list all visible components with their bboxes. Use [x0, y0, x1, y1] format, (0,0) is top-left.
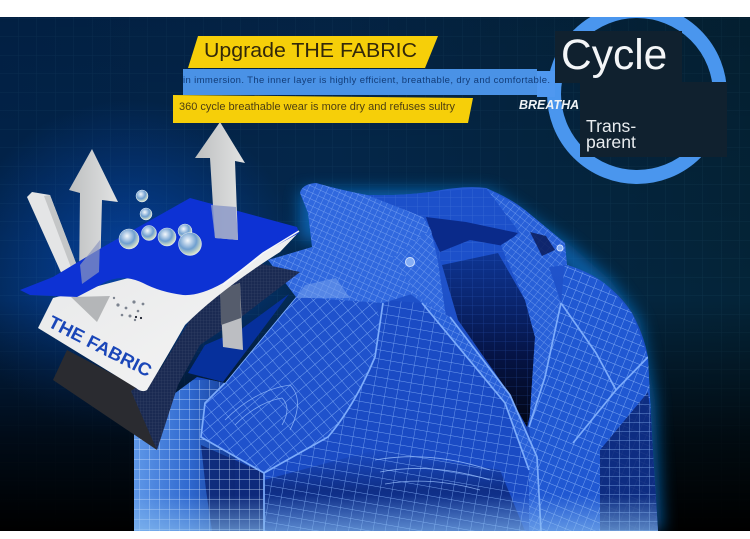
grey upward arrow left: [69, 149, 118, 285]
front placket: [422, 303, 541, 531]
navy translucent layer: [188, 294, 289, 382]
diagonal arrow lower tip: [71, 296, 110, 322]
heading banner: Upgrade THE FABRIC: [188, 36, 438, 68]
dark box: Cycle: Cycle: [561, 32, 667, 79]
dark box: Transparent: Trans-: [586, 116, 636, 136]
fabric label text: THE FABRIC: [45, 312, 155, 381]
white sheet edge: [223, 231, 299, 285]
blue circle ring: [554, 11, 720, 177]
shirt seams: [201, 297, 648, 531]
white membrane layer: [38, 233, 298, 391]
left chest mesh panel: [202, 348, 368, 472]
water vapour specks: [113, 297, 144, 321]
dark interior of shirt opening: [442, 253, 535, 427]
dark mesh layer drape: [131, 262, 300, 450]
breathable label: BREATHA: [519, 98, 579, 112]
grey diagonal arrow: [27, 192, 84, 288]
bottom light fade: [130, 495, 660, 531]
center front mesh panel: [265, 332, 529, 531]
shirt collar button left: [406, 258, 414, 266]
dark mesh bottom layer: [53, 350, 157, 450]
dark box: Transparent: [580, 82, 727, 157]
blue description band: [183, 69, 555, 97]
fabric layers illustration: [20, 122, 300, 450]
inner back neck: [375, 188, 489, 196]
blue top fabric sheet: [20, 198, 299, 297]
heading banner: Upgrade THE FABRIC: Upgrade THE FABRIC: [204, 40, 417, 62]
dark box: Transparent: parent: [586, 132, 636, 152]
yellow description band: [173, 95, 473, 123]
collar stand flap: [393, 230, 446, 317]
center lower dark shading: [264, 450, 525, 531]
shirt collar button right: [557, 245, 563, 251]
dark inner collar shadow: [426, 217, 518, 252]
collar dark weave patch: [530, 232, 555, 256]
left collar: [300, 183, 436, 310]
upper left shoulder yoke: [268, 247, 415, 303]
yellow description band: 360 cycle breathable wear is more dry and refuses sultry: [179, 101, 456, 113]
right collar: [486, 188, 567, 427]
wireframe shirt: [130, 180, 660, 535]
right lower sleeve: [600, 392, 658, 531]
grey upward arrow right: [195, 122, 245, 240]
water droplets: [119, 190, 202, 256]
left sleeve mesh: [134, 380, 264, 531]
chest wrinkle lines: [225, 385, 490, 490]
lower part of right arrow: [220, 283, 243, 350]
right chest and shoulder mesh: [529, 262, 658, 531]
blue description band: in immersion. The inner layer is highly efficient, breathable, dry and comfortable.: [183, 75, 550, 86]
